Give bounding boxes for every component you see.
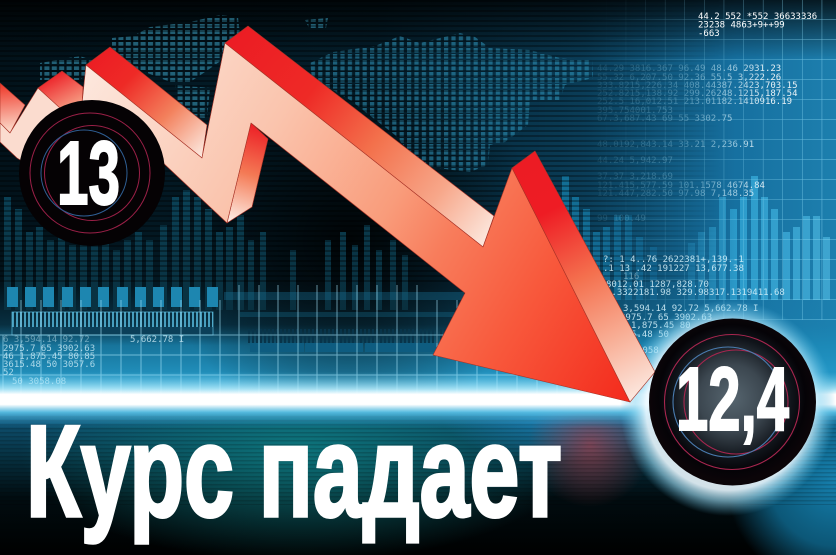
- map: americas: [40, 15, 328, 118]
- data text: lower table: 9.3322181.98 329.98317.1319411.68: [606, 288, 785, 298]
- grid: upper right: [612, 0, 836, 320]
- data text: lower left: [3, 335, 184, 387]
- arrow: left tail: [0, 88, 60, 172]
- data text: middle table: 48.0192,843.14 33.21 2,236.91: [597, 140, 754, 150]
- data text: middle table: 121.415,577.59 101.1578 4674.84: [597, 181, 765, 191]
- data text: top right: 44.2 552 *552 36633336: [698, 12, 817, 22]
- data text: lower left: 2975.7 65 3902.63: [3, 344, 95, 354]
- data text: lower table: ?: 1 4..76 2622381+,139.-1: [603, 255, 744, 265]
- data text: middle table: 333.8215,226.34 408.44387.2423,703.15: [597, 81, 797, 91]
- data text: middle table: 121.447,282.50 97.98 7,148.35: [597, 189, 754, 199]
- badge: 12,4: [649, 318, 816, 486]
- arrow: top face 1: [0, 83, 25, 133]
- scanlines: [0, 5, 695, 282]
- arrow: top face 3: [86, 47, 207, 158]
- title: Курс падает: [26, 398, 562, 544]
- data text: lower table: 3058: [637, 346, 659, 356]
- map: eurasia: [310, 33, 593, 172]
- data text: lower left: 3615.48 50 3057.6: [3, 360, 95, 370]
- background panel: [0, 0, 836, 405]
- data text: middle table: 67.3,687.43 69 55 3302.75: [597, 114, 732, 124]
- data text: lower left: 6 3,594.14 92.72: [3, 335, 90, 345]
- data text: lower table: 8012.01 1287,828.70: [606, 280, 709, 290]
- hatched strip: left: [12, 312, 213, 335]
- data text: lower table: .1 13 .42 191227 13,677.38: [603, 264, 744, 274]
- data text: middle table: 252.8215,138.92 299.26248.1215,187.54: [597, 89, 797, 99]
- data text: lower left: 50 3058.08: [12, 377, 66, 387]
- value: 13: 13: [57, 124, 120, 224]
- arrow: fold: [227, 123, 268, 223]
- data text: lower left: 5,662.78 I: [130, 335, 184, 345]
- data text: lower left: 52: [3, 368, 14, 378]
- data text: middle table: 37.37 3,218.69: [597, 172, 673, 182]
- data text: top right: [698, 12, 817, 39]
- data text: lower table: [603, 255, 785, 356]
- data text: middle table: 44.29 3816.367 96.49 48.46 2931.23: [597, 64, 781, 74]
- data text: lower table: 5.48 50: [631, 330, 669, 340]
- world map: [40, 15, 593, 172]
- lower panel: [0, 370, 836, 555]
- data text: lower table: 2975.7 65 3902.63: [620, 313, 712, 323]
- data text: middle table: 395.754001.753: [597, 106, 673, 116]
- bar chart: right: [562, 176, 830, 300]
- arrow: top face 2: [38, 71, 83, 112]
- data text: lower table: 3,594.14 92.72 5,662.78 I: [623, 304, 758, 314]
- data text: middle table: 55.32 6,207.50 92.36 55.5 3,222.26: [597, 73, 781, 83]
- halo around lower-right badge: [620, 300, 836, 516]
- data text: lower table: 116: [623, 272, 639, 282]
- glow band: [0, 372, 836, 428]
- data text: top right: 23238 4863+9++99: [698, 20, 785, 30]
- bar chart: left: [4, 190, 408, 310]
- data text: middle table: 44.24 5,942.97: [597, 156, 673, 166]
- arrow: head side face: [512, 151, 655, 402]
- grid: lower: [0, 285, 640, 394]
- data text: lower left: 46 1,875.45 80.85: [3, 352, 95, 362]
- data text: middle table: 252.5 16,012.51 213.01182.1410916.19: [597, 97, 792, 107]
- data text: middle table: 99 100.49: [597, 214, 646, 224]
- tile row: [7, 287, 464, 307]
- data text: top right: -663: [698, 29, 720, 39]
- hatched strip: centre: [240, 312, 473, 352]
- arrow: top face 4: [225, 26, 494, 247]
- arrow: front face: [82, 43, 630, 402]
- badge: 13: [19, 100, 165, 246]
- falling arrow: [0, 26, 655, 402]
- data text: lower table: 1,875.45 80: [631, 321, 691, 331]
- data text: middle table: [597, 64, 797, 224]
